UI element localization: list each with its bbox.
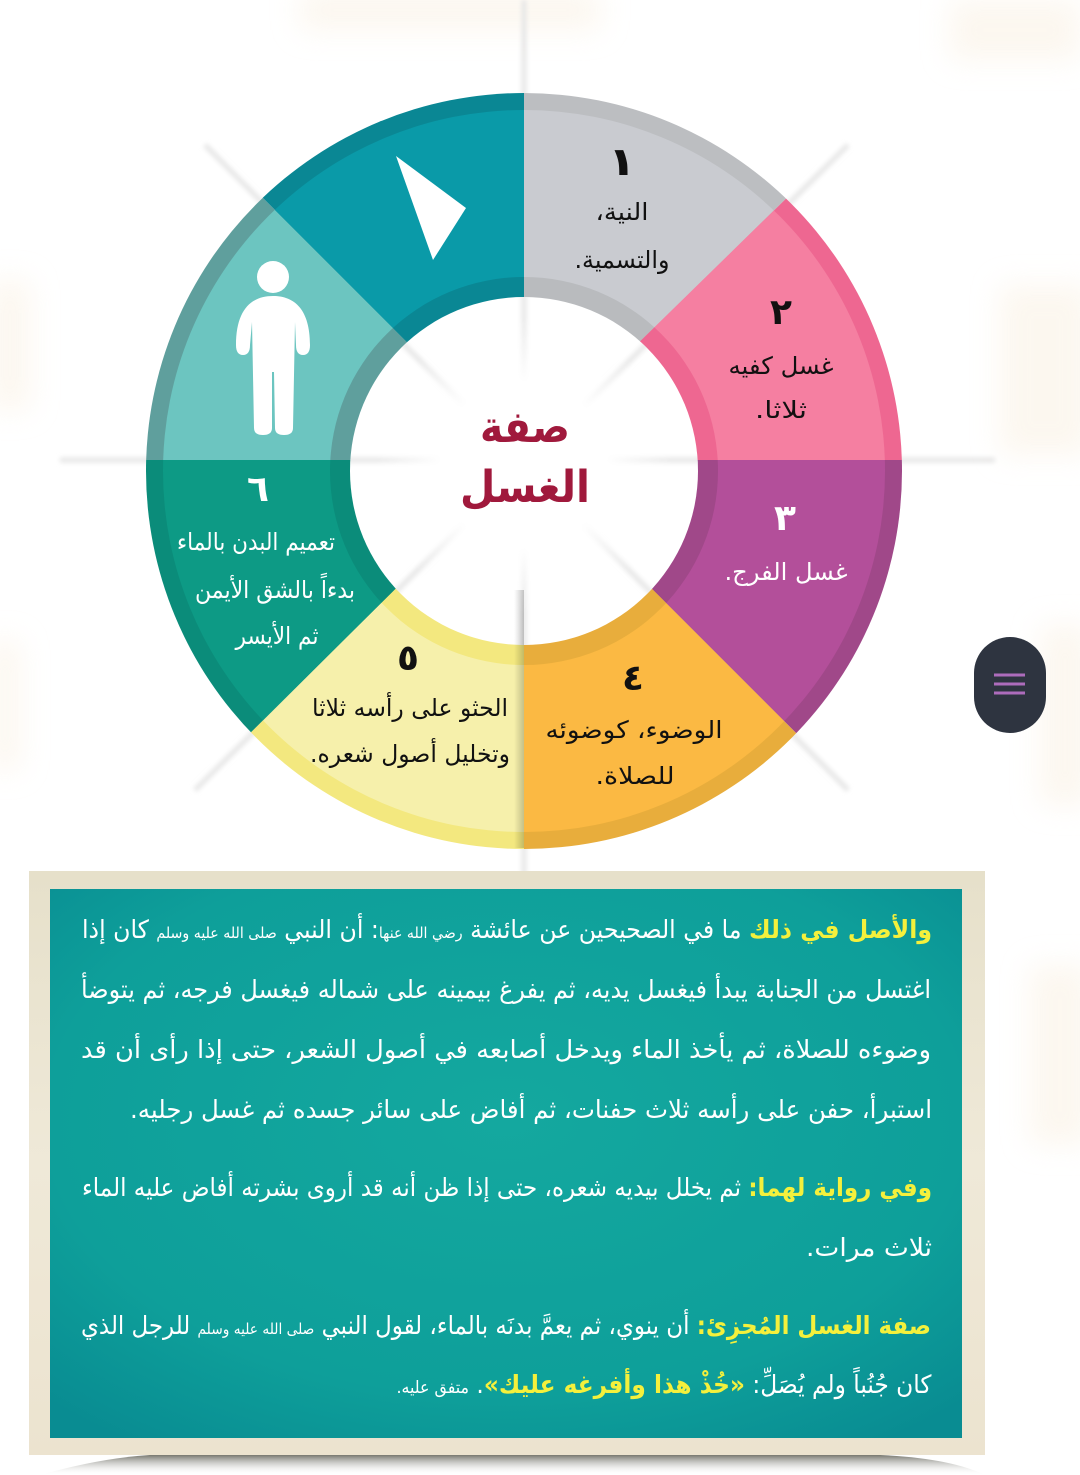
step 6 text: ٦	[247, 469, 269, 510]
step 2 text: ٢	[770, 292, 792, 333]
segment 1 gray	[524, 93, 786, 342]
step 4 text: الوضوء، كوضوئه	[546, 716, 722, 744]
step 3 text: ٣	[774, 498, 796, 539]
paragraph three: صفة الغسل المُجزِئ: أن ينوي، ثم يعمَّ بدنَه بالماء، لقول النبي صلى الله عليه وسلم للرجل الذي	[81, 1308, 931, 1345]
step 6 text: تعميم البدن بالماء	[177, 528, 335, 556]
paragraph one: اغتسل من الجنابة يبدأ فيغسل يديه، ثم يفرغ بيمينه على شماله فيغسل فرجه، ثم يتوضأ	[81, 971, 931, 1005]
step 5 text: وتخليل أصول شعره.	[310, 738, 510, 768]
color wheel	[146, 93, 902, 849]
paragraph three: كان جُنُباً ولم يُصَلِّ: «خُذْ هذا وأفرغه عليك». متفق عليه.	[397, 1366, 932, 1400]
segment 3 purple	[652, 460, 902, 734]
menu button	[974, 637, 1046, 733]
paragraph two	[82, 1170, 932, 1262]
step 3 text: غسل الفرج.	[724, 558, 848, 586]
step 1 text: النية،	[596, 198, 648, 226]
step 2 text	[728, 292, 834, 424]
icon: white triangle	[396, 156, 466, 260]
step 1 text: والتسمية.	[574, 246, 670, 274]
step 5 text: الحثو على رأسه ثلاثا	[312, 692, 508, 722]
paragraph one: استبرأ، حفن على رأسه ثلاث حفنات، ثم أفاض على سائر جسده ثم غسل رجليه.	[130, 1092, 932, 1125]
segment 7 light teal	[146, 198, 407, 460]
paragraph two: وفي رواية لهما: ثم يخلل بيديه شعره، حتى إذا ظن أنه قد أروى بشرته أفاض عليه الماء	[82, 1170, 932, 1203]
step 2 text: غسل كفيه	[728, 352, 834, 380]
step 4 text: ٤	[622, 658, 644, 699]
step 1 text: ١	[611, 142, 633, 183]
segment 4 orange	[524, 589, 796, 849]
step 4 text	[546, 658, 722, 790]
segment 6 green	[146, 460, 396, 732]
step 3 text	[724, 498, 848, 586]
bottom board shadow	[40, 1455, 985, 1475]
paragraph one: والأصل في ذلك ما في الصحيحين عن عائشة رضي الله عنها: أن النبي صلى الله عليه وسلم كان إذا	[82, 912, 932, 945]
step 1 text	[574, 142, 670, 274]
step 5 text	[310, 638, 510, 768]
inner white circle	[350, 297, 698, 645]
paragraph three	[81, 1308, 932, 1400]
step 6 text	[177, 469, 355, 650]
paragraph one	[81, 912, 932, 1125]
segment 8 dark teal	[262, 93, 524, 342]
paragraph two: ثلاث مرات.	[806, 1233, 932, 1262]
step 6 text: ثم الأيسر	[235, 621, 318, 650]
step 2 text: ثلاثا.	[755, 396, 807, 424]
center title	[460, 402, 590, 513]
segment 2 pink	[640, 198, 902, 460]
center title: صفة	[480, 402, 570, 453]
step 5 text: ٥	[397, 638, 419, 679]
center title: الغسل	[460, 462, 590, 513]
step 6 text: بدءاً بالشق الأيمن	[195, 573, 355, 604]
icon: person figure	[236, 261, 310, 435]
text panel frame	[29, 871, 985, 1455]
segment 5 yellow	[251, 588, 524, 849]
text panel board	[50, 889, 962, 1438]
step 4 text: للصلاة.	[596, 762, 674, 790]
paragraph one: وضوءه للصلاة، ثم يأخذ الماء ويدخل أصابعه في أصول الشعر، حتى إذا رأى أن قد	[81, 1031, 931, 1065]
